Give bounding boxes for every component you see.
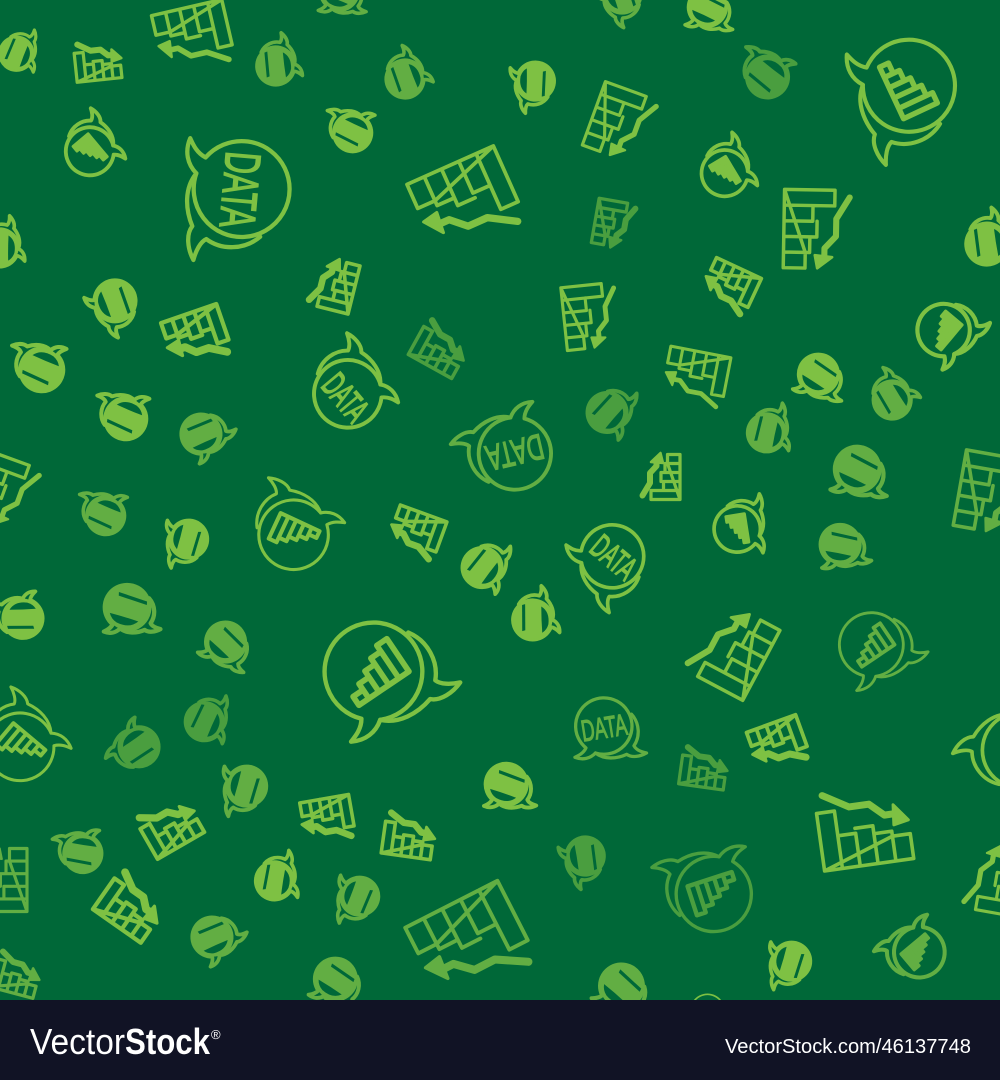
logo: VectorStock <box>30 1021 221 1062</box>
icon: bar chart <box>698 257 761 316</box>
icon: partial bubble <box>945 690 1000 799</box>
icon: small bubble <box>93 577 172 653</box>
icon: small bubble <box>150 511 213 577</box>
icon: small bubble <box>753 933 817 999</box>
icon: large bubble with DATA: DATA <box>209 150 271 231</box>
icon: partial bar chart <box>0 451 41 533</box>
icon: large bubble with DATA <box>142 115 306 287</box>
icon: bubble with bars <box>232 456 354 582</box>
icon: bar chart <box>661 346 731 408</box>
icon: small bubble <box>300 950 376 1025</box>
icon: bubble with bars <box>0 676 76 789</box>
icon: bar chart <box>135 792 206 859</box>
icon: bubble with bars <box>839 613 928 691</box>
icon: small bubble <box>862 359 924 425</box>
icon: bubble with DATA: DATA <box>482 426 548 479</box>
icon: falling bar chart <box>814 784 914 871</box>
icon: small bubble <box>178 683 245 752</box>
icon: small bubble <box>251 843 310 907</box>
icon: bar chart <box>783 189 850 269</box>
icon: bubble with bars <box>700 131 760 198</box>
icon: bar chart <box>407 146 525 256</box>
icon: bar chart <box>93 869 170 944</box>
icon: bubble with DATA: DATA <box>579 709 630 748</box>
footer bar <box>0 1000 1000 1080</box>
logo: VectorStock: ® <box>211 1027 221 1042</box>
icon: bubble with DATA <box>565 523 648 615</box>
icon: small bubble <box>503 58 557 117</box>
icon: small bubble <box>95 713 165 780</box>
icon: bubble with bars <box>639 824 765 940</box>
icon: small bubble <box>191 614 263 687</box>
icon: bar chart <box>385 504 447 561</box>
icon: partial bar chart <box>963 841 1000 917</box>
icon: small bubble <box>474 757 548 827</box>
icon: bar chart <box>159 304 232 370</box>
icon: bar chart <box>561 282 620 351</box>
icon: small bubble <box>188 909 253 969</box>
icon: bar chart <box>642 453 680 500</box>
icon: small bubble <box>380 41 435 101</box>
icon: bubble with bars <box>871 913 947 982</box>
icon: small bubble <box>679 987 741 1049</box>
icon: small bubble <box>742 395 804 460</box>
icon: small bubble <box>0 586 46 640</box>
icon: small bubble <box>315 92 383 159</box>
icon: small bubble <box>821 438 902 518</box>
icon: bubble with DATA: DATA <box>583 528 644 588</box>
icon: small bubble <box>320 866 385 935</box>
icon: small bubble <box>966 208 1000 265</box>
logo: VectorStock: Stock <box>125 1021 211 1062</box>
icon: partial bar chart <box>953 450 1000 536</box>
icon: bubble with bars <box>61 105 127 178</box>
icon: partial bar chart <box>0 848 27 912</box>
icon: bubble with DATA: DATA <box>314 365 377 430</box>
icon: small bubble <box>812 519 880 583</box>
icon: small bubble <box>0 324 76 399</box>
icon: small bubble <box>256 32 304 86</box>
icon: large bubble with bars <box>831 30 962 174</box>
icon: small bubble <box>84 374 159 447</box>
icon: small bubble <box>0 212 32 271</box>
icon: bubble with DATA <box>306 328 401 432</box>
icon: bubble with bars <box>706 482 785 564</box>
icon: small bubble <box>584 956 662 1035</box>
icon: small bubble <box>728 30 803 106</box>
icon: small bubble <box>677 0 745 48</box>
icon: bar chart <box>582 82 658 164</box>
icon: small bubble <box>785 346 858 419</box>
image id url: VectorStock.com/46137748 <box>725 1036 971 1058</box>
icon: bubble with DATA <box>450 400 552 490</box>
icon: large bubble with rising bars <box>325 623 460 742</box>
icon: bar chart <box>381 812 438 860</box>
icon: small bubble <box>511 583 565 643</box>
icon: small bubble <box>207 757 273 826</box>
icon: small bubble <box>579 375 652 447</box>
logo: VectorStock: Vector <box>30 1021 125 1062</box>
icon: bar chart <box>591 198 636 251</box>
icon: bar chart <box>679 747 730 790</box>
icon: small bubble <box>177 406 242 466</box>
icon: bubble with DATA <box>561 689 661 784</box>
icon: partial bar chart <box>0 950 44 999</box>
icon: bar chart <box>152 0 235 74</box>
icon: bar chart <box>745 715 810 774</box>
icon: small bubble <box>309 0 378 31</box>
icon: small bubble <box>592 0 646 32</box>
icon: large bar chart <box>405 881 537 1005</box>
icon: bar chart <box>308 254 360 314</box>
icon: bar chart <box>73 40 123 82</box>
icon: small bubble <box>82 277 143 343</box>
icon: rising bar chart <box>684 599 780 700</box>
icon: bar chart <box>408 318 473 379</box>
icon: small bubble <box>558 837 604 889</box>
icon: small bubble <box>67 475 136 542</box>
icon: small bubble <box>0 20 52 80</box>
icon: bubble with bars <box>911 292 999 374</box>
icon: small bubble <box>454 529 527 602</box>
icon: small bubble <box>45 818 109 877</box>
icon: bar chart <box>298 794 356 844</box>
